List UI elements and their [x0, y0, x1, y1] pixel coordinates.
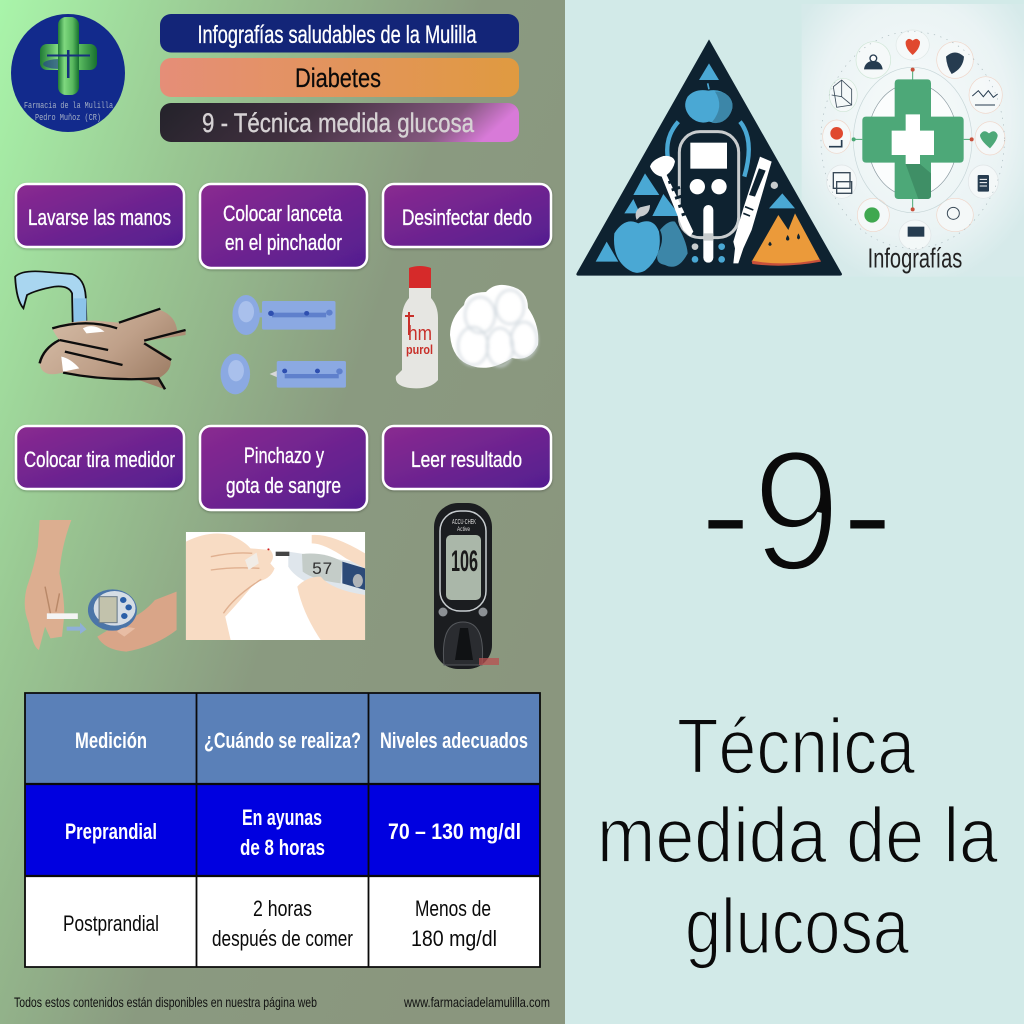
illustration: alcohol bottle [396, 266, 438, 388]
illustration: pricking finger with meter [186, 532, 365, 640]
icon: pharmacy logo [11, 14, 125, 132]
footer website: www.farmaciadelamulilla.com [403, 994, 550, 1010]
step label: wash hands: Lavarse las manos [28, 205, 171, 230]
table row: postprandial: 2 horas [253, 896, 312, 921]
heading: series title pill: Infografías saludables de la Mulilla [198, 21, 477, 49]
step label: read result: Leer resultado [411, 447, 522, 472]
step label: insert strip: Colocar tira medidor [24, 447, 175, 472]
icon: diabetes triangle emblem [577, 40, 842, 275]
table row: postprandial: 180 mg/dl [411, 926, 497, 951]
illustration: pricking finger with meter: 57 [312, 561, 333, 580]
step label: wash hands [16, 184, 184, 247]
step label: read result [383, 426, 551, 489]
table header row: Medición [75, 728, 147, 753]
panel: left infographic background [0, 0, 565, 1024]
heading: diabetes pill: Diabetes [295, 63, 381, 93]
panel: right cover background [565, 0, 1024, 1024]
cover title: Técnica [677, 702, 916, 790]
table row: postprandial [63, 896, 497, 951]
table row: preprandial: Preprandial [65, 819, 157, 844]
table header row: Niveles adecuados [380, 728, 528, 753]
illustration: glucose meter with reading: Active [457, 527, 471, 533]
table header row: ¿Cuándo se realiza? [204, 728, 361, 753]
table row: preprandial [65, 805, 521, 860]
table row: postprandial: Postprandial [63, 911, 159, 936]
footer note: Todos estos contenidos están disponibles en nuestra página web [14, 994, 317, 1010]
table row: preprandial: En ayunas [242, 805, 322, 830]
step label: place lancet [200, 184, 367, 268]
table row: postprandial: después de comer [212, 926, 353, 951]
cover title [597, 702, 999, 970]
big number: -9- [699, 415, 894, 607]
illustration: glucose meter with reading [434, 503, 499, 669]
icon: infographics medical cross emblem: Infografías [868, 242, 962, 273]
illustration: lancet and lancing device [221, 295, 346, 394]
table row: preprandial: 70 – 130 mg/dl [388, 819, 521, 844]
icon: pharmacy logo: Pedro Muñoz (CR) [35, 113, 101, 123]
step label: disinfect finger [383, 184, 551, 247]
icon: pharmacy logo: Farmacia de la Mulilla [24, 101, 113, 111]
step label: prick and blood drop [200, 426, 367, 510]
table header row [75, 728, 528, 753]
illustration: inserting strip in meter [25, 520, 177, 652]
heading: topic pill: 9 - Técnica medida glucosa [202, 108, 475, 138]
illustration: glucose meter with reading: 106 [451, 545, 478, 578]
table row: preprandial: de 8 horas [240, 835, 325, 860]
heading: diabetes pill [160, 58, 519, 97]
heading: topic pill [160, 103, 519, 142]
heading: series title pill [160, 14, 519, 52]
step label: prick and blood drop: gota de sangre [226, 473, 341, 498]
icon: infographics medical cross emblem [802, 4, 1024, 277]
illustration: glucose meter with reading: ACCU-CHEK [452, 519, 476, 526]
illustration: washing hands [15, 271, 186, 389]
illustration: alcohol bottle: purol [406, 342, 433, 357]
step label: disinfect finger: Desinfectar dedo [402, 205, 532, 230]
table row: postprandial: Menos de [415, 896, 491, 921]
step label: insert strip [16, 426, 184, 489]
step label: place lancet: Colocar lanceta [223, 201, 343, 226]
table: glucose measurement levels [25, 693, 540, 967]
step label: place lancet: en el pinchador [225, 230, 342, 255]
illustration: alcohol bottle: hm [408, 323, 432, 345]
illustration: cotton balls [450, 285, 538, 368]
step label: prick and blood drop: Pinchazo y [244, 443, 324, 468]
cover title: glucosa [685, 882, 910, 970]
